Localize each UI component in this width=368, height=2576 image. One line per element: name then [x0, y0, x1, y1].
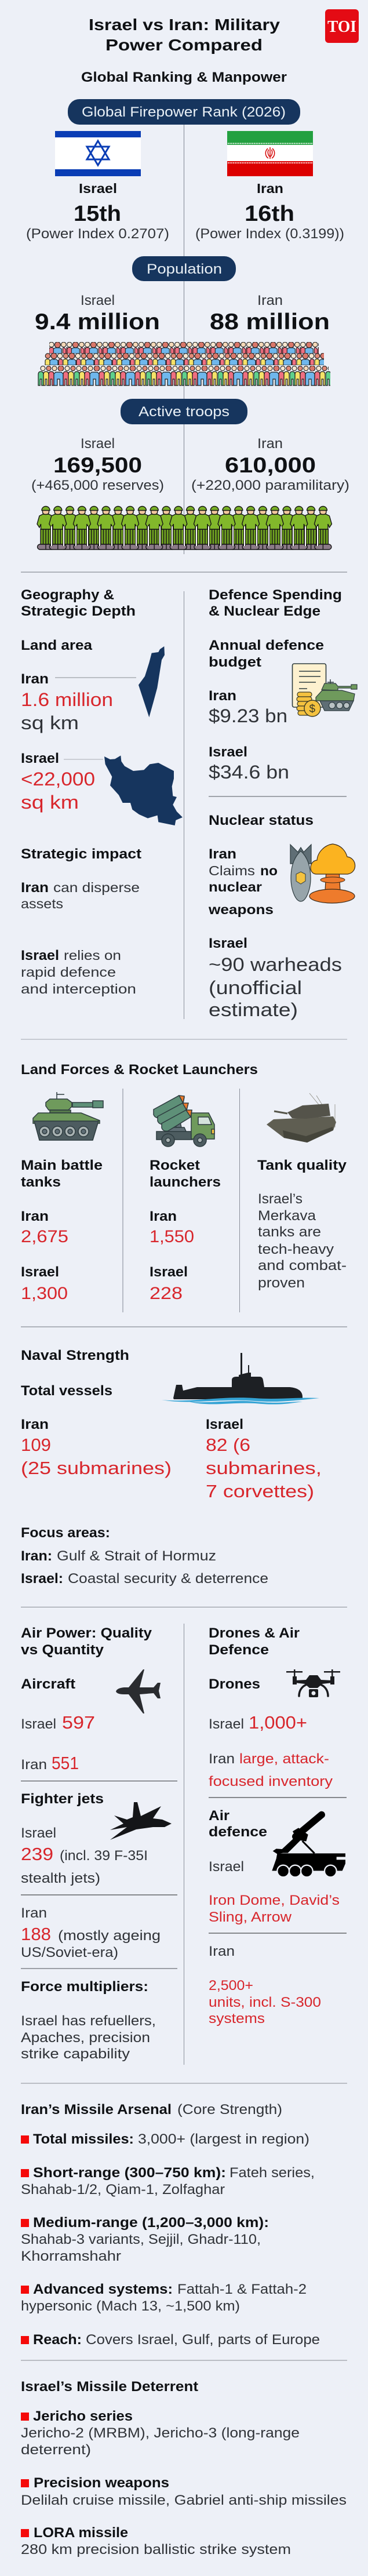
- stat: drones: [209, 1676, 333, 1789]
- panel: Israel rank: 15th: [74, 202, 121, 226]
- column: rocket launchers: [150, 1158, 221, 1303]
- pill: global firepower rank: Global Firepower Rank (2026): [82, 104, 286, 120]
- list item: short-range: [21, 2165, 315, 2197]
- stat: fighter jets: Israel: [21, 1825, 56, 1841]
- stat: Iran fighter jets: [21, 1905, 161, 1960]
- stat: Iran nuclear: [208, 846, 278, 917]
- text: strategic impact: Israel: [21, 948, 59, 963]
- stat: Israel vessels: 7 corvettes): [206, 1481, 314, 1501]
- pill: active troops: [121, 399, 247, 424]
- panel: Iran troops: (+220,000 paramilitary): [191, 478, 349, 493]
- column: tank quality: Merkava: [258, 1208, 316, 1224]
- heading: geography: Strategic Depth: [21, 603, 136, 619]
- panel: Israel troops: Israel: [81, 436, 115, 452]
- text: strategic impact: rapid defence: [21, 965, 116, 980]
- column: tank quality: Israel’s: [258, 1191, 303, 1207]
- icon: drone: [286, 1669, 340, 1697]
- stat: Iran land area: sq km: [21, 712, 79, 733]
- stat: Iran land area: [21, 671, 113, 733]
- heading: Iran's missile arsenal: [21, 2102, 282, 2117]
- pill: global firepower rank: [68, 99, 300, 125]
- text: focus areas: Coastal security & deterrence: [68, 1571, 268, 1587]
- panel: Iran population: [210, 293, 330, 334]
- icon: stealth fighter jet: [110, 1802, 172, 1840]
- stat: Israel land area: Israel: [21, 751, 59, 766]
- icon: airplane: [116, 1669, 161, 1713]
- stat: Israel land area: [21, 751, 95, 813]
- icon: Iran map: [104, 755, 183, 825]
- heading: defence spending: [209, 587, 342, 619]
- stat: fighter jets: [21, 1791, 148, 1886]
- list item: Jericho series: deterrent): [21, 2442, 91, 2458]
- list item: medium-range: Khorramshahr: [21, 2248, 121, 2264]
- list item: total missiles: Total missiles:: [33, 2131, 134, 2147]
- subheading: annual defence budget: Annual defence: [209, 638, 324, 653]
- text: strategic impact: Iran: [21, 880, 49, 896]
- list item: reach: Covers Israel, Gulf, parts of Europe: [86, 2332, 320, 2348]
- icon: crowd of people: [38, 342, 330, 386]
- heading: defence spending: & Nuclear Edge: [209, 603, 320, 619]
- column: main battle tanks: tanks: [21, 1174, 61, 1190]
- pill: active troops: Active troops: [139, 404, 229, 420]
- stat: fighter jets: Fighter jets: [21, 1791, 104, 1807]
- stat: Israel nuclear: estimate): [209, 999, 298, 1020]
- stat: Iran budget: $9.23 bn: [209, 705, 287, 726]
- stat: Iran air defence: units, incl. S-300: [209, 1995, 321, 2010]
- column: main battle tanks: Israel: [21, 1264, 59, 1280]
- panel: naval strength: [21, 1348, 322, 1587]
- stat: Israel land area: sq km: [21, 792, 79, 813]
- column: tank quality: proven: [258, 1275, 305, 1291]
- stat: Israel vessels: submarines,: [206, 1458, 322, 1478]
- logo: TOI: TOI: [327, 18, 356, 36]
- panel: Iran population: Iran: [257, 293, 283, 308]
- subheading: nuclear status: Nuclear status: [209, 813, 314, 828]
- stat: fighter jets: stealth jets): [21, 1871, 100, 1886]
- panel: air power: [21, 1625, 177, 2062]
- pill: population: [132, 256, 236, 281]
- panel: Iran troops: [191, 436, 349, 493]
- text: force multipliers: strike capability: [21, 2046, 130, 2062]
- heading: naval strength: Naval Strength: [21, 1348, 129, 1363]
- panel: Iran rank: [195, 181, 344, 242]
- panel: Iran rank: (Power Index (0.3199)): [195, 226, 344, 242]
- heading: Iran's missile arsenal: (Core Strength): [177, 2102, 282, 2117]
- text: strategic impact: and interception: [21, 981, 136, 996]
- list item: Jericho series: Jericho-2 (MRBM), Jericho-3 (long-range: [21, 2425, 300, 2441]
- text: force multipliers: [21, 1979, 156, 2062]
- list item: short-range: Fateh series,: [229, 2165, 315, 2181]
- stat: Iran budget: [209, 688, 287, 726]
- list item: precision weapons: Precision weapons: [34, 2475, 169, 2491]
- stat: air defence: [209, 1808, 340, 1925]
- text: focus areas: Gulf & Strait of Hormuz: [57, 1548, 216, 1564]
- panel: Israel troops: [31, 436, 164, 493]
- list item: advanced systems: Fattah-1 & Fattah-2: [177, 2282, 307, 2297]
- stat: Israel nuclear: [209, 936, 342, 1020]
- stat: Iran air defence: Iran: [209, 1944, 235, 1959]
- subheading: annual defence budget: [209, 638, 324, 670]
- column: main battle tanks: Main battle: [21, 1158, 103, 1173]
- column: tank quality: tanks are: [258, 1224, 321, 1240]
- title: [89, 16, 280, 54]
- stat: aircraft: Israel: [21, 1716, 56, 1732]
- heading: air power: Air Power: Quality: [21, 1625, 152, 1641]
- panel: Israel troops: 169,500: [53, 453, 142, 477]
- list item: precision weapons: [21, 2475, 347, 2508]
- column: rocket launchers: 228: [150, 1284, 183, 1303]
- panel: Israel rank: (Power Index 0.2707): [26, 226, 169, 242]
- stat: Israel vessels: 82 (6: [206, 1435, 250, 1455]
- stat: aircraft: [21, 1676, 95, 1773]
- panel: Israel troops: (+465,000 reserves): [31, 478, 164, 493]
- heading: air power: [21, 1625, 152, 1658]
- text: strategic impact: relies on: [64, 948, 121, 963]
- list item: precision weapons: Delilah cruise missile, Gabriel anti-ship missiles: [21, 2493, 347, 2508]
- stat: drones: Israel: [209, 1716, 244, 1732]
- stat: air defence: Israel: [209, 1859, 244, 1875]
- column: tank quality: Tank quality: [257, 1158, 347, 1173]
- icon: Israeli flag: [55, 131, 141, 176]
- panel: Iran troops: 610,000: [225, 453, 316, 477]
- panel: Israel population: [35, 293, 160, 334]
- icon: rocket launcher truck: [154, 1096, 214, 1147]
- stat: Israel nuclear: ~90 warheads: [209, 954, 342, 975]
- panel: Israel population: Israel: [81, 293, 115, 308]
- column: rocket launchers: Israel: [150, 1264, 188, 1280]
- stat: Israel vessels: Israel: [206, 1417, 243, 1432]
- stat: drones: large, attack-: [239, 1751, 329, 1767]
- icon: Iranian flag: [227, 131, 313, 176]
- title: Power Compared: [105, 36, 263, 54]
- pill: population: Population: [147, 261, 222, 277]
- heading: air power: vs Quantity: [21, 1642, 104, 1658]
- panel: Iran rank: Iran: [257, 181, 283, 196]
- stat: air defence: defence: [209, 1824, 267, 1840]
- stat: Israel nuclear: (unofficial: [209, 977, 302, 998]
- icon: air defence launcher: [272, 1815, 345, 1877]
- stat: Israel budget: [209, 744, 289, 783]
- text: focus areas: Focus areas:: [21, 1525, 110, 1541]
- list item: Jericho series: [21, 2408, 300, 2458]
- column: main battle tanks: 1,300: [21, 1284, 68, 1303]
- stat: Iran air defence: 2,500+: [209, 1978, 253, 1993]
- list item: LORA missile: 280 km precision ballistic strike system: [21, 2542, 291, 2557]
- list item: reach: Reach:: [33, 2332, 82, 2348]
- panel: Iran rank: 16th: [245, 202, 294, 226]
- panel: defence spending and nuclear edge: [208, 587, 357, 1020]
- column: rocket launchers: Iran: [150, 1209, 177, 1224]
- heading: geography: [21, 587, 136, 619]
- icon: budget document, tank and coins: $: [309, 703, 315, 715]
- stat: Iran fighter jets: US/Soviet-era): [21, 1945, 118, 1960]
- stat: Iran budget: Iran: [209, 688, 236, 704]
- stat: Israel vessels: [206, 1417, 322, 1501]
- panel: Israel rank: Israel: [79, 181, 117, 196]
- list item: Jericho series: Jericho series: [33, 2408, 133, 2424]
- column: main battle tanks: Iran: [21, 1209, 49, 1224]
- stat: Israel land area: <22,000: [21, 769, 95, 789]
- text: strategic impact: [21, 846, 141, 996]
- panel: Israel rank: [26, 181, 169, 242]
- stat: fighter jets: (incl. 39 F-35I: [60, 1848, 148, 1864]
- stat: Iran land area: 1.6 million: [21, 689, 113, 710]
- heading: defence spending: Defence Spending: [209, 587, 342, 603]
- stat: Iran fighter jets: 188: [21, 1924, 51, 1944]
- icon: row of soldiers: [37, 507, 331, 550]
- subheading: annual defence budget: budget: [209, 654, 261, 670]
- title: Israel vs Iran: Military: [89, 16, 280, 34]
- stat: Iran vessels: Iran: [21, 1417, 49, 1432]
- column: main battle tanks: 2,675: [21, 1227, 68, 1246]
- stat: Israel budget: Israel: [209, 744, 247, 760]
- stat: air defence: Air: [209, 1808, 229, 1824]
- heading: global ranking and manpower: Global Ranking & Manpower: [81, 70, 287, 85]
- column: tank quality: [257, 1158, 347, 1291]
- list item: advanced systems: hypersonic (Mach 13, ~1,500 km): [21, 2298, 240, 2314]
- column: rocket launchers: launchers: [150, 1174, 221, 1190]
- subheading: total vessels: Total vessels: [21, 1383, 112, 1399]
- stat: Iran air defence: [209, 1944, 321, 2026]
- panel: Iran's missile arsenal: [21, 2102, 320, 2348]
- list item: total missiles: [21, 2131, 309, 2147]
- list item: total missiles: 3,000+ (largest in region): [138, 2131, 309, 2147]
- icon: submarine: [162, 1353, 319, 1405]
- column: tank quality: tech-heavy: [258, 1242, 334, 1257]
- list item: medium-range: Medium-range (1,200–3,000 km):: [33, 2215, 269, 2231]
- stat: drones: Iran: [209, 1751, 235, 1767]
- text: force multipliers: Israel has refuellers,: [21, 2013, 156, 2029]
- heading: geography: Geography &: [21, 587, 114, 603]
- panel: drones and air defence: [209, 1625, 347, 2026]
- stat: Iran nuclear: weapons: [208, 902, 274, 917]
- column: rocket launchers: Rocket: [150, 1158, 200, 1173]
- stat: aircraft: 551: [52, 1753, 79, 1773]
- text: strategic impact: can disperse: [53, 880, 140, 895]
- text: strategic impact: Strategic impact: [21, 846, 141, 862]
- text: focus areas: Israel:: [21, 1571, 63, 1587]
- stat: Israel nuclear: Israel: [209, 936, 247, 951]
- list item: medium-range: Shahab-3 variants, Sejjil, Ghadr-110,: [21, 2232, 261, 2247]
- icon: budget document, tank and coins: [292, 664, 357, 716]
- panel: geography and strategic depth: [21, 587, 183, 996]
- icon: Israel map: [139, 646, 165, 717]
- column: rocket launchers: 1,550: [150, 1227, 194, 1246]
- stat: air defence: Iron Dome, David’s: [209, 1893, 340, 1908]
- stat: Iran fighter jets: Iran: [21, 1905, 47, 1921]
- text: strategic impact: assets: [21, 896, 63, 911]
- list item: medium-range: [21, 2215, 269, 2264]
- list item: LORA missile: [21, 2525, 291, 2557]
- centre divider: ranking section: [183, 125, 184, 554]
- list item: short-range: Short-range (300–750 km):: [33, 2165, 226, 2181]
- heading: Iran's missile arsenal: Iran’s Missile Arsenal: [21, 2102, 172, 2117]
- icon: battle tank: [33, 1092, 103, 1140]
- heading: Israel's missile deterrent: Israel’s Missile Deterrent: [21, 2379, 198, 2395]
- panel: Israel population: 9.4 million: [35, 310, 160, 334]
- panel: Iran population: 88 million: [210, 310, 330, 334]
- stat: Iran nuclear: Iran: [209, 846, 236, 862]
- panel: Israel's missile deterrent: [21, 2379, 347, 2557]
- stat: Iran air defence: systems: [209, 2011, 265, 2026]
- stat: Israel budget: $34.6 bn: [209, 762, 289, 783]
- logo: TOI: [325, 9, 359, 43]
- stat: Iran vessels: 109: [21, 1435, 51, 1455]
- text: force multipliers: Apaches, precision: [21, 2030, 150, 2046]
- stat: drones: focused inventory: [209, 1774, 333, 1789]
- list item: advanced systems: [21, 2282, 307, 2314]
- stat: Iran vessels: (25 submarines): [21, 1458, 172, 1478]
- stat: Iran vessels: [21, 1417, 172, 1478]
- stat: Iran land area: Iran: [21, 671, 49, 687]
- icon: Merkava tank: [267, 1093, 336, 1143]
- heading: drones and air defence: Defence: [209, 1642, 269, 1658]
- panel: land forces and rocket launchers: [21, 1062, 347, 1312]
- text: force multipliers: Force multipliers:: [21, 1979, 148, 1995]
- icon: nuclear bomb and mushroom cloud: [290, 844, 355, 903]
- list item: LORA missile: LORA missile: [34, 2525, 128, 2541]
- stat: Iran nuclear: no: [260, 863, 278, 878]
- list item: advanced systems: Advanced systems:: [33, 2282, 173, 2297]
- column: tank quality: and combat-: [258, 1258, 347, 1274]
- stat: Iran nuclear: Claims: [209, 863, 255, 878]
- stat: drones: Drones: [209, 1676, 260, 1692]
- stat: air defence: Sling, Arrow: [209, 1909, 292, 1925]
- stat: fighter jets: 239: [21, 1844, 53, 1864]
- heading: drones and air defence: Drones & Air: [209, 1625, 300, 1641]
- text: focus areas: Iran:: [21, 1548, 52, 1564]
- panel: Iran troops: Iran: [257, 436, 283, 452]
- stat: aircraft: 597: [62, 1712, 95, 1733]
- heading: drones and air defence: [209, 1625, 300, 1658]
- heading: land forces: Land Forces & Rocket Launchers: [21, 1062, 258, 1078]
- stat: Iran fighter jets: (mostly ageing: [58, 1928, 161, 1944]
- stat: aircraft: Aircraft: [21, 1676, 75, 1692]
- text: focus areas: [21, 1525, 268, 1587]
- stat: aircraft: Iran: [21, 1757, 47, 1773]
- column: main battle tanks: [21, 1158, 103, 1303]
- subheading: land area: Land area: [21, 638, 93, 653]
- stat: drones: 1,000+: [249, 1712, 307, 1733]
- stat: Iran nuclear: nuclear: [209, 879, 262, 894]
- list item: short-range: Shahab-1/2, Qiam-1, Zolfaghar: [21, 2182, 225, 2197]
